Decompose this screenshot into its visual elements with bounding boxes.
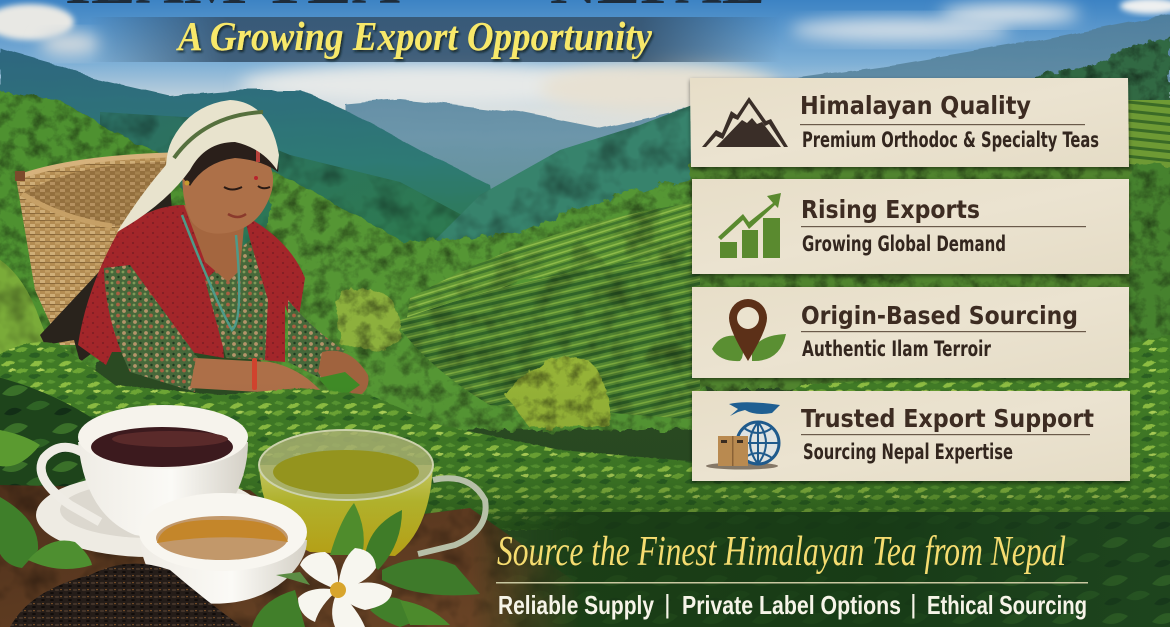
tea cups group <box>0 405 486 627</box>
hair and basket strap <box>40 185 175 362</box>
green tea glass cup <box>259 430 486 556</box>
white headscarf <box>117 100 279 232</box>
text: Trusted Export Support <box>801 404 1094 464</box>
text: Rising Exports <box>801 195 1086 256</box>
face <box>182 148 273 234</box>
text: Origin-Based Sourcing: Authentic Ilam Terroir <box>802 337 992 361</box>
text: Trusted Export Support: Sourcing Nepal Expertise <box>803 440 1013 464</box>
necklace <box>182 215 239 330</box>
bottom call-to-action banner: | <box>910 589 917 619</box>
background: forested hillsides <box>0 90 1170 430</box>
bottom call-to-action banner: Ethical Sourcing <box>927 590 1087 620</box>
neck and chest <box>184 205 245 282</box>
panel: Origin-Based Sourcing <box>692 287 1129 378</box>
loose black tea pile <box>10 564 242 627</box>
text: Himalayan Quality: Himalayan Quality <box>800 91 1031 120</box>
foreground tea bushes <box>0 335 1170 530</box>
wicker basket <box>15 155 170 345</box>
text: Himalayan Quality <box>800 91 1099 152</box>
text: Origin-Based Sourcing <box>801 301 1086 361</box>
title (cropped at top edge) <box>65 0 765 16</box>
background: terraced tea gardens <box>395 203 700 420</box>
green leaves at left <box>0 430 92 569</box>
icon: location pin with leaves <box>712 299 786 361</box>
bottom call-to-action banner: | <box>664 589 671 619</box>
background: round trees <box>335 288 610 428</box>
text: Rising Exports: Growing Global Demand <box>802 232 1006 256</box>
panel: Rising Exports <box>692 179 1129 274</box>
patterned blouse <box>104 265 198 392</box>
bottom call-to-action banner: Private Label Options <box>682 590 901 620</box>
text: Origin-Based Sourcing: Origin-Based Sourcing <box>801 301 1078 330</box>
arms and hands <box>190 358 322 402</box>
icon: mountain <box>702 97 788 147</box>
black tea cup and saucer <box>36 405 264 557</box>
red shawl <box>78 205 224 365</box>
background: Himalayan mountain ranges <box>0 14 1170 270</box>
background: sky and clouds <box>0 0 1170 160</box>
hair on forehead <box>180 138 279 186</box>
icon: rising bar chart <box>718 193 781 258</box>
panel: Trusted Export Support <box>692 391 1130 481</box>
text: Trusted Export Support: Trusted Export Support <box>801 404 1094 433</box>
bottom call-to-action banner <box>470 512 1170 627</box>
bottom call-to-action banner: Reliable Supply <box>498 590 654 620</box>
tea picker woman with basket <box>15 100 369 402</box>
panel: Himalayan Quality <box>690 78 1129 167</box>
icon: globe with export box <box>706 402 780 470</box>
text: Rising Exports: Rising Exports <box>801 195 980 224</box>
white flower with leaves <box>252 503 480 627</box>
amber tea bowl <box>139 493 307 604</box>
subtitle banner: A Growing Export Opportunity <box>175 13 653 59</box>
wooden table <box>0 485 640 627</box>
